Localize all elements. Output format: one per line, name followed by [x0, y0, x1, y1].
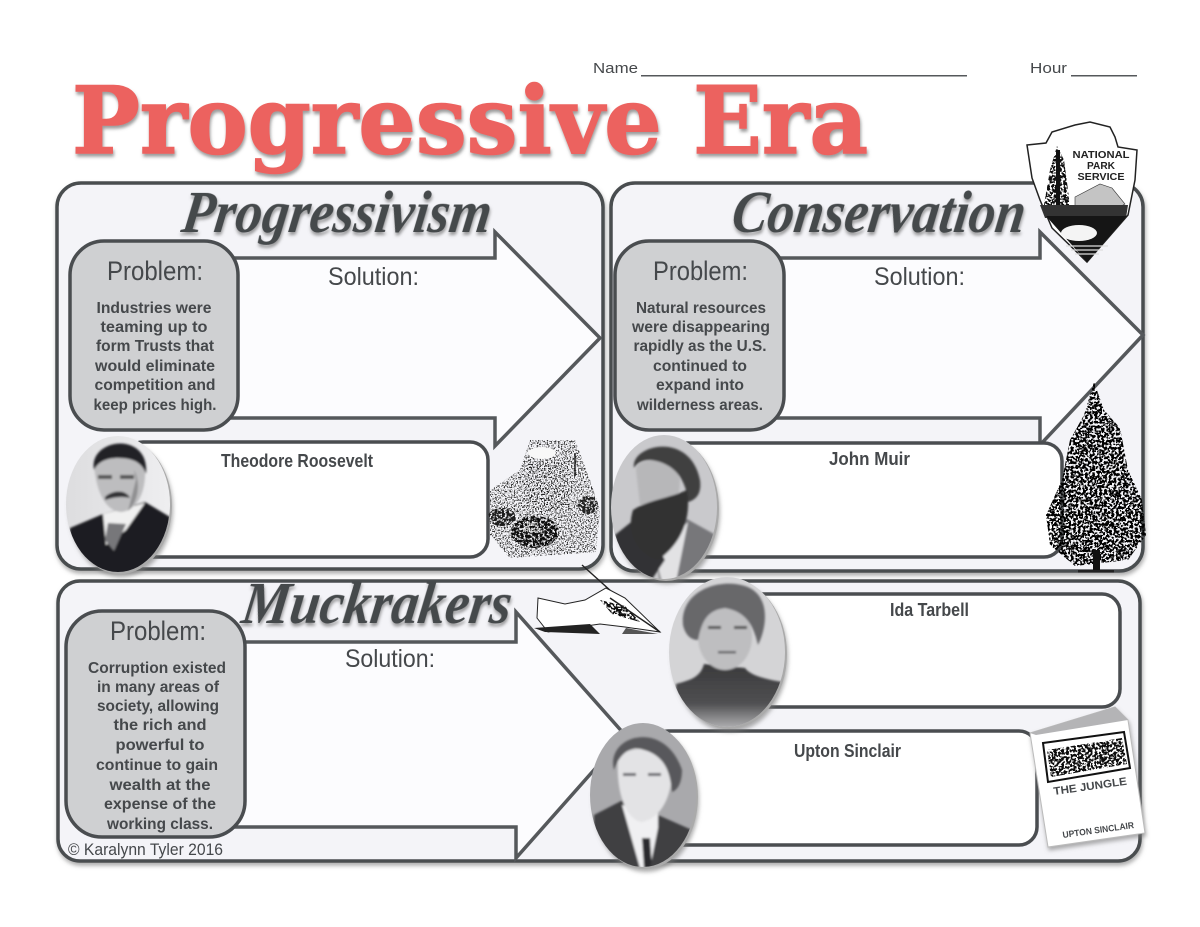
arrow: progressivism solution: [225, 232, 600, 446]
problem box: muckrakers: continue to gain: [96, 757, 218, 774]
problem box: progressivism: would eliminate: [94, 358, 215, 375]
portrait: John Muir: [608, 430, 724, 582]
problem box: progressivism: [70, 241, 238, 430]
problem box: muckrakers: the rich and: [114, 717, 206, 734]
heading: progressivism: Progressivism: [177, 179, 496, 246]
problem box: progressivism: form Trusts that: [96, 338, 215, 355]
problem box: muckrakers: powerful to: [116, 737, 205, 754]
problem box: conservation: continued to: [653, 358, 747, 375]
icon: National Park Service badge: PARK: [1087, 160, 1115, 172]
name field: Name: [593, 60, 638, 77]
name box: Ida Tarbell: [735, 594, 1120, 707]
problem box: progressivism: teaming up to: [100, 319, 208, 336]
icon: Roosevelt trust-busting cartoon: BAD: [527, 522, 538, 528]
name box: John Muir: John Muir: [829, 449, 910, 469]
problem box: progressivism: Problem:: [107, 256, 203, 286]
portrait: Upton Sinclair: [588, 720, 700, 870]
name box: Upton Sinclair: Upton Sinclair: [794, 741, 901, 761]
panel: muckrakers background: [58, 581, 1140, 861]
problem box: muckrakers: expense of the: [104, 796, 216, 813]
name box: Theodore Roosevelt: [125, 442, 488, 557]
icon: National Park Service badge: SERVICE: [1078, 171, 1124, 183]
problem box: conservation: [615, 241, 784, 430]
icon: pine tree: [1046, 382, 1146, 572]
panel: conservation background: [611, 183, 1143, 571]
icon: Roosevelt trust-busting cartoon: [488, 440, 600, 558]
name box: John Muir: [670, 443, 1062, 557]
icon: Roosevelt trust-busting cartoon: TRUSTS: [522, 528, 543, 534]
problem box: progressivism: Industries were: [96, 300, 212, 317]
icon: The Jungle book: UPTON SINCLAIR: [1062, 820, 1135, 840]
problem box: muckrakers: [66, 611, 245, 837]
problem box: progressivism: keep prices high.: [94, 397, 216, 414]
problem box: conservation: expand into: [656, 377, 744, 394]
problem box: conservation: rapidly as the U.S.: [634, 338, 766, 355]
portrait: Ida Tarbell: [668, 576, 788, 730]
problem box: muckrakers: in many areas of: [97, 679, 220, 696]
problem box: conservation: wilderness areas.: [636, 397, 763, 414]
name box: Ida Tarbell: Ida Tarbell: [890, 600, 969, 620]
problem box: muckrakers: working class.: [106, 816, 213, 833]
panel: progressivism background: [57, 183, 603, 569]
problem box: muckrakers: wealth at the: [108, 777, 211, 794]
hour field: Hour: [1030, 60, 1067, 77]
heading: conservation: Conservation: [728, 179, 1030, 246]
arrow: muckrakers solution: [230, 612, 625, 858]
problem box: muckrakers: Corruption existed: [88, 660, 226, 677]
problem box: muckrakers: society, allowing: [97, 698, 219, 715]
portrait: Theodore Roosevelt: [66, 436, 176, 579]
label: solution: Solution:: [874, 263, 965, 291]
copyright: © Karalynn Tyler 2016: [68, 840, 223, 859]
problem box: progressivism: competition and: [94, 377, 216, 394]
problem box: conservation: Natural resources: [636, 300, 766, 317]
icon: The Jungle book: THE JUNGLE: [1053, 776, 1128, 798]
problem box: muckrakers: Problem:: [110, 616, 206, 646]
icon: National Park Service badge: [1027, 122, 1137, 262]
problem box: conservation: were disappearing: [631, 319, 770, 336]
arrow: conservation solution: [770, 232, 1143, 445]
problem box: conservation: Problem:: [653, 256, 748, 286]
icon: The Jungle book: [1030, 707, 1145, 847]
title: Progressive Era: [72, 66, 868, 175]
hour field: [1030, 60, 1137, 77]
label: solution: Solution:: [328, 263, 419, 291]
label: solution: Solution:: [345, 645, 435, 673]
name box: Theodore Roosevelt: Theodore Roosevelt: [221, 451, 373, 471]
icon: National Park Service badge: NATIONAL: [1072, 149, 1130, 161]
name box: Upton Sinclair: [650, 731, 1037, 845]
icon: hand holding pen: [534, 565, 660, 634]
heading: muckrakers: Muckrakers: [237, 570, 516, 637]
